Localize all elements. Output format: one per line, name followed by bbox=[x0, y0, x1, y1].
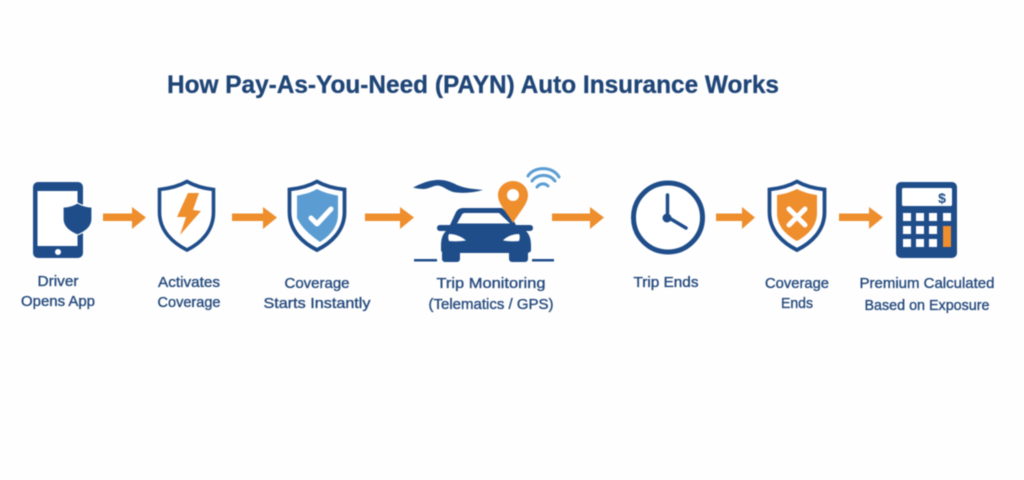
icon: shield with x mark bbox=[770, 182, 824, 250]
label: coverage starts instantly: Starts Instantly bbox=[264, 295, 371, 312]
icon: phone with shield bbox=[33, 182, 92, 258]
step 1: driver opens app bbox=[21, 182, 95, 310]
icon: shield with check mark bbox=[290, 182, 344, 250]
step 6: coverage ends bbox=[765, 182, 829, 312]
label: driver opens app: Opens App bbox=[21, 293, 95, 310]
arrow 5 bbox=[716, 207, 755, 229]
label: trip monitoring: (Telematics / GPS) bbox=[428, 296, 554, 313]
label: coverage ends: Ends bbox=[781, 295, 813, 312]
icon: road swoosh bbox=[413, 180, 483, 193]
arrow 1 bbox=[103, 207, 146, 229]
arrow 6 bbox=[839, 207, 883, 229]
step 5: trip ends bbox=[634, 183, 702, 291]
label: premium calculated bbox=[860, 275, 994, 314]
label: coverage ends: Coverage bbox=[765, 275, 829, 292]
label: trip monitoring bbox=[428, 275, 554, 313]
label: driver opens app bbox=[21, 273, 95, 310]
label: activates coverage: Coverage bbox=[158, 294, 220, 311]
icon: calculator: $ bbox=[938, 190, 946, 206]
step 4: trip monitoring bbox=[413, 169, 559, 313]
arrow 3 bbox=[365, 207, 414, 229]
label: coverage ends bbox=[765, 275, 829, 312]
icon: location pin bbox=[498, 181, 528, 223]
label: premium calculated: Based on Exposure bbox=[864, 297, 990, 314]
label: driver opens app: Driver bbox=[38, 273, 79, 290]
icon: wifi signal bbox=[528, 169, 559, 187]
step 2: activates coverage bbox=[158, 182, 220, 311]
arrow 2 bbox=[232, 207, 277, 229]
label: coverage starts instantly: Coverage bbox=[284, 275, 350, 292]
step 3: coverage starts instantly bbox=[264, 182, 371, 312]
icon: car bbox=[414, 208, 554, 262]
label: trip monitoring: Trip Monitoring bbox=[436, 275, 546, 292]
icon: clock bbox=[634, 183, 702, 252]
icon: shield with lightning bolt bbox=[160, 182, 214, 250]
arrow 4 bbox=[552, 207, 604, 229]
label: activates coverage: Activates bbox=[158, 274, 220, 291]
step 7: premium calculated bbox=[860, 182, 994, 314]
label: activates coverage bbox=[158, 274, 220, 311]
label: trip ends: Trip Ends bbox=[634, 274, 698, 291]
label: premium calculated: Premium Calculated bbox=[860, 275, 994, 292]
title: How Pay-As-You-Need (PAYN) Auto Insurance Works bbox=[167, 71, 779, 99]
label: coverage starts instantly bbox=[264, 275, 371, 312]
